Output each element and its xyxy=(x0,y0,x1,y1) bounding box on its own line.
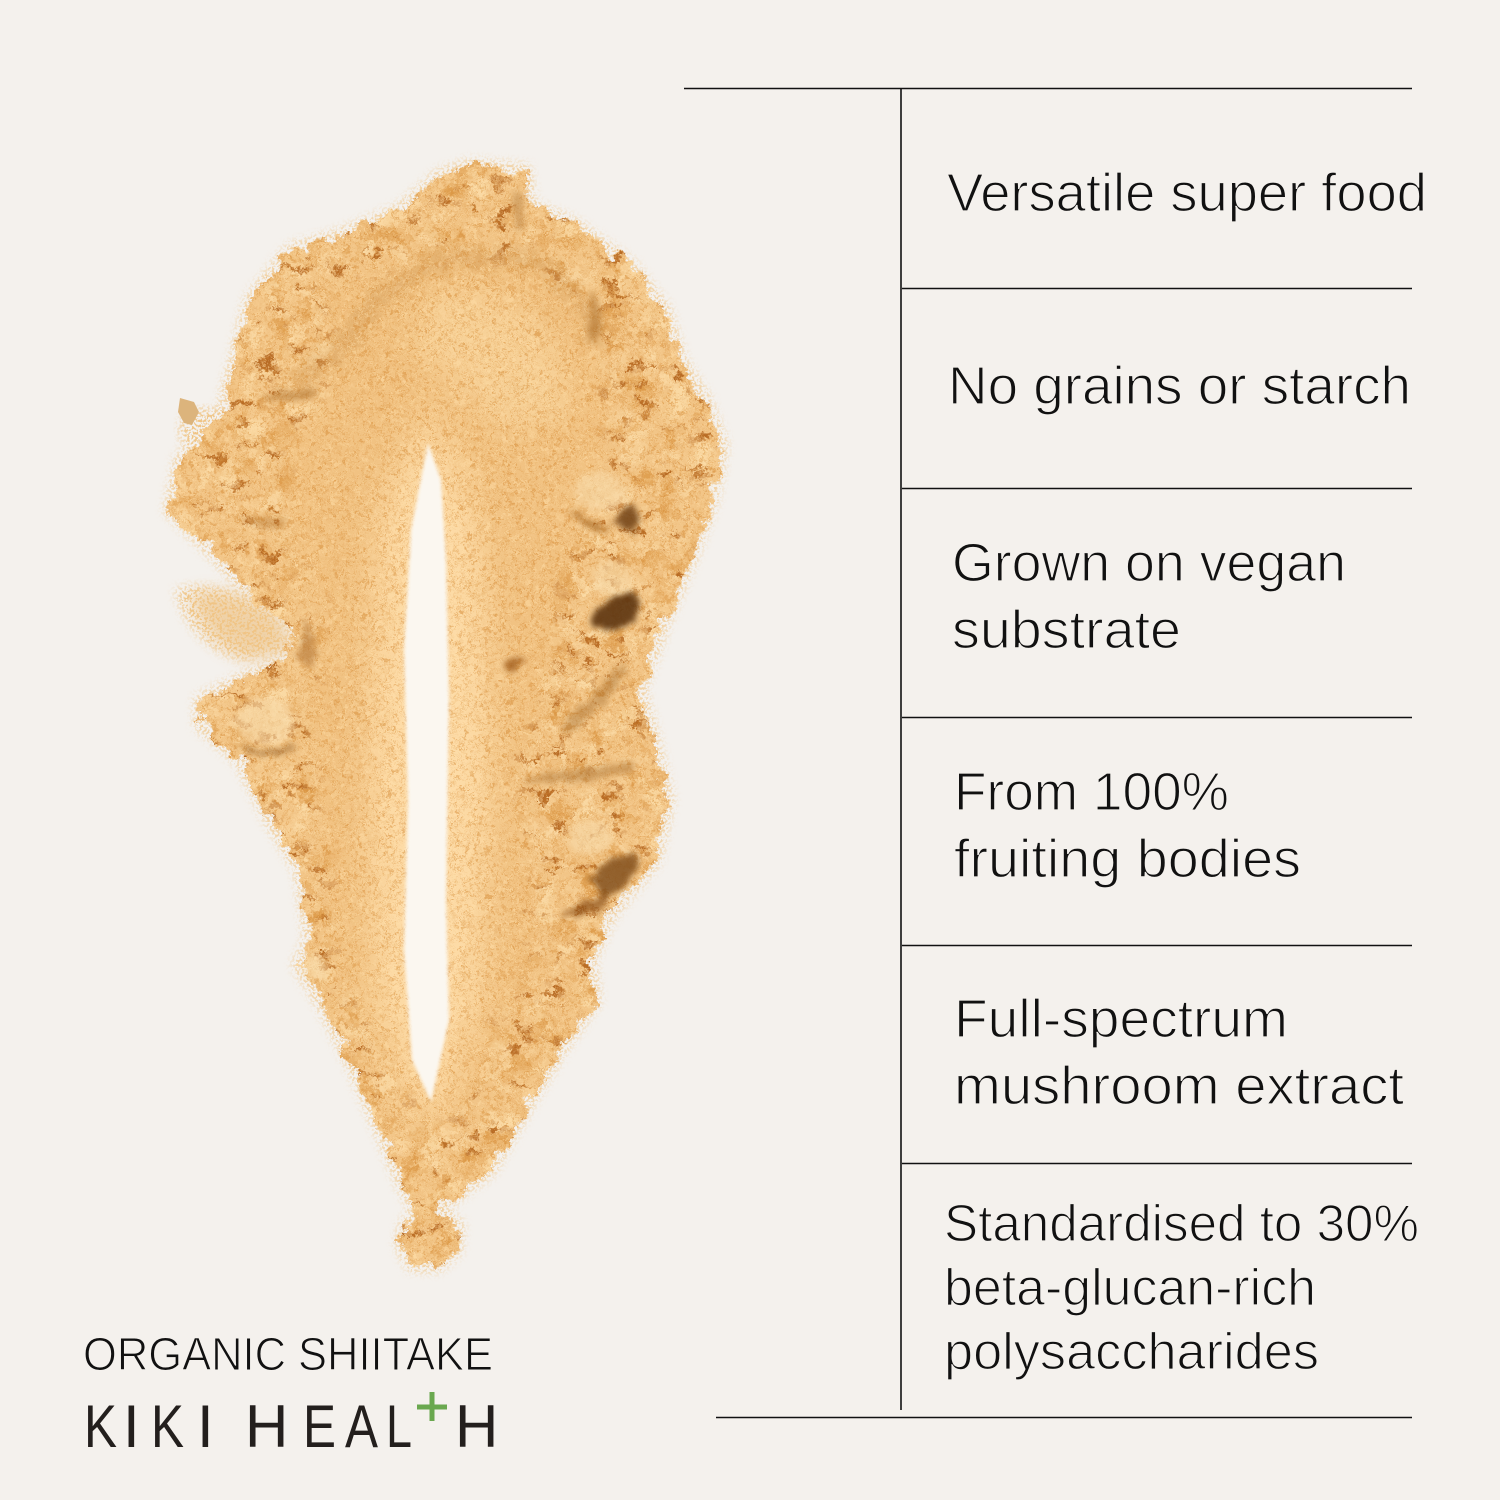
raised clumps xyxy=(235,472,632,980)
feature: standardised beta-glucan: beta-glucan-rich xyxy=(944,1259,1316,1317)
feature: grown on vegan substrate: Grown on vegan xyxy=(952,533,1346,593)
feature: full-spectrum mushroom extract xyxy=(954,989,1404,1116)
powder swatch illustration xyxy=(150,150,750,1280)
feature: from 100% fruiting bodies xyxy=(954,762,1301,889)
feature: standardised beta-glucan xyxy=(944,1195,1419,1381)
logo: Kiki Health: H xyxy=(245,1393,288,1460)
feature: grown on vegan substrate xyxy=(952,533,1346,660)
logo: Kiki Health: K xyxy=(84,1393,117,1460)
product name: ORGANIC SHIITAKE xyxy=(83,1328,493,1380)
feature: from 100% fruiting bodies: From 100% xyxy=(954,762,1229,822)
icon: green plus standing in for T xyxy=(417,1392,447,1421)
table rules xyxy=(684,88,1412,1418)
feature: full-spectrum mushroom extract: mushroom extract xyxy=(954,1056,1404,1116)
logo: Kiki Health: L xyxy=(386,1393,412,1460)
feature: full-spectrum mushroom extract: Full-spectrum xyxy=(954,989,1288,1049)
logo: Kiki Health: H xyxy=(455,1393,498,1460)
centre gap in powder xyxy=(404,443,449,1102)
feature: standardised beta-glucan: polysaccharides xyxy=(944,1323,1319,1381)
logo: Kiki Health: A xyxy=(345,1393,378,1460)
feature: no grains or starch: No grains or starch xyxy=(948,356,1411,416)
feature: versatile super food: Versatile super food xyxy=(947,163,1427,223)
logo: Kiki Health: I xyxy=(123,1393,140,1460)
shadow crevices xyxy=(235,190,640,916)
feature: from 100% fruiting bodies: fruiting bodies xyxy=(954,829,1301,889)
logo: Kiki Health: K xyxy=(151,1393,184,1460)
logo: Kiki Health xyxy=(84,1392,498,1460)
feature: grown on vegan substrate: substrate xyxy=(952,600,1181,660)
logo: Kiki Health: I xyxy=(197,1393,214,1460)
logo: Kiki Health: E xyxy=(303,1393,336,1460)
loose particle xyxy=(178,398,199,425)
feature: standardised beta-glucan: Standardised to 30% xyxy=(944,1195,1419,1253)
